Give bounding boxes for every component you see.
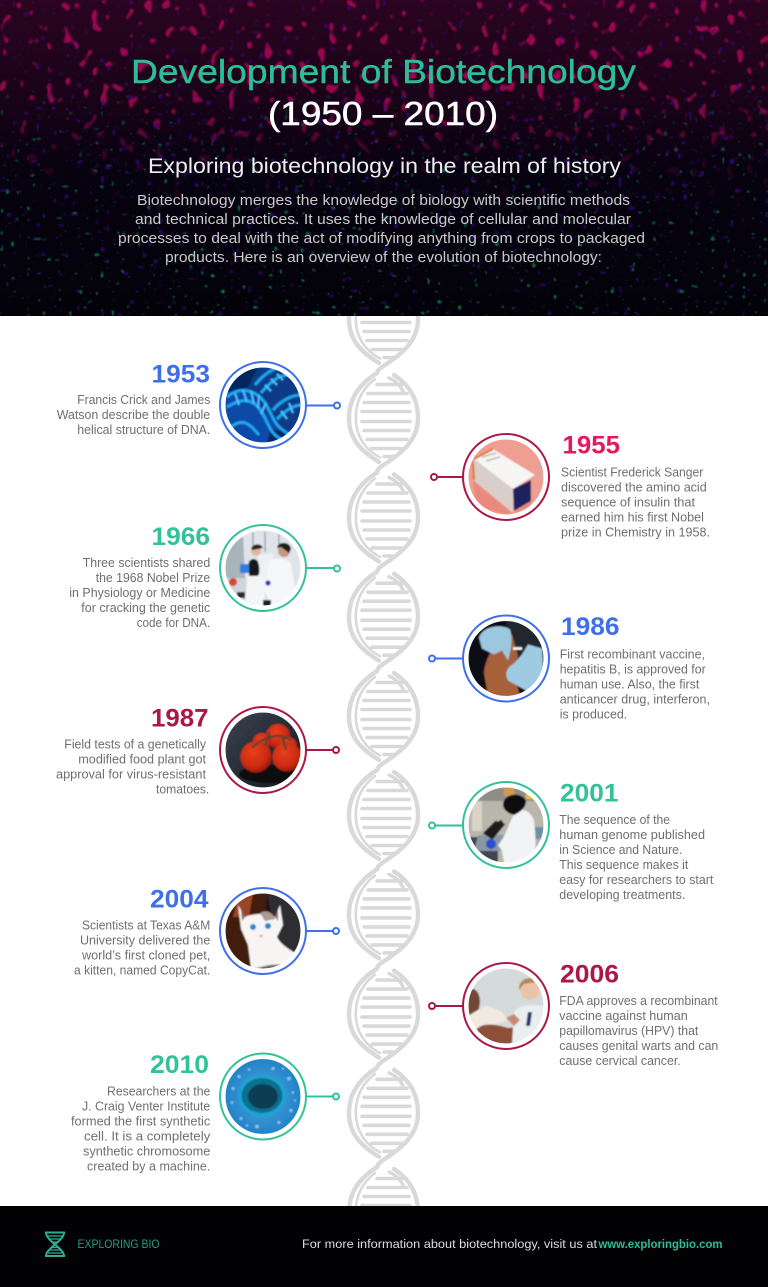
year 2010: 2010	[150, 1051, 209, 1079]
photo: lab scientists	[220, 525, 306, 611]
text 1953: helical structure of DNA.	[77, 422, 210, 437]
connector 1953	[306, 404, 334, 406]
text 2001: This sequence makes it	[559, 857, 689, 872]
text 1986: anticancer drug, interferon,	[560, 691, 710, 706]
text 2004: a kitten, named CopyCat.	[74, 962, 210, 977]
text 2001: easy for researchers to start	[559, 872, 714, 887]
text 1955: earned him his first Nobel	[561, 510, 704, 525]
entry: 2001	[429, 780, 714, 902]
photo: tomatoes	[220, 707, 306, 793]
connector 2001	[435, 824, 463, 826]
footer panel	[0, 1206, 768, 1287]
year 1955: 1955	[562, 432, 620, 460]
connector 2010	[306, 1096, 333, 1098]
entry: 1987	[56, 705, 339, 796]
entry: 1953	[57, 360, 340, 448]
text 1986: human use. Also, the first	[560, 676, 700, 691]
photo: scientist at microscope	[463, 782, 549, 868]
subtitle: Exploring biotechnology in the realm of history	[148, 154, 621, 178]
node 1966	[334, 566, 340, 572]
entry: 2010	[71, 1051, 339, 1174]
text 1955: discovered the amino acid	[561, 480, 707, 495]
text 1955: Scientist Frederick Sanger	[561, 465, 704, 480]
text 2004: Scientists at Texas A&M	[82, 917, 210, 932]
photo: insulin box	[463, 434, 549, 520]
title: Development of Biotechnology	[131, 53, 637, 90]
text 1966: Three scientists shared	[83, 555, 210, 570]
text 1966: the 1968 Nobel Prize	[96, 570, 210, 585]
text 1953	[57, 392, 210, 437]
entry: 2004	[74, 885, 339, 977]
intro paragraph: Biotechnology merges the knowledge of biology with scientific methods	[137, 193, 630, 209]
footer link: www.exploringbio.com	[598, 1237, 722, 1251]
text 2006: causes genital warts and can	[559, 1038, 718, 1053]
year 2006: 2006	[560, 960, 619, 988]
text 1953: Watson describe the double	[57, 407, 210, 422]
connector 2006	[435, 1005, 463, 1007]
text 2001: The sequence of the	[559, 812, 670, 827]
photo: white kitten	[220, 888, 306, 974]
text 1987	[56, 736, 209, 796]
text 1966: in Physiology or Medicine	[69, 585, 210, 600]
node 1953	[334, 402, 340, 408]
intro paragraph: and technical practices. It uses the knowledge of cellular and molecular	[135, 212, 631, 228]
text 2001: human genome published	[559, 827, 705, 842]
text 1966	[69, 555, 211, 630]
photo: DNA strands	[220, 362, 306, 448]
header panel	[0, 0, 768, 316]
text 2010: created by a machine.	[87, 1158, 210, 1174]
intro paragraph	[118, 193, 645, 266]
year 1986: 1986	[561, 613, 620, 641]
year 1966: 1966	[152, 523, 210, 551]
node 2004	[333, 928, 339, 934]
connector 1986	[435, 658, 463, 660]
footer call to action: For more information about biotechnology, visit us at	[302, 1237, 598, 1251]
logo wordmark: EXPLORING BIO	[78, 1237, 160, 1251]
node 1986	[429, 656, 435, 662]
text 2006: cause cervical cancer.	[559, 1053, 681, 1068]
entry: 1966	[69, 523, 340, 630]
text 1953: Francis Crick and James	[77, 392, 210, 407]
node 2010	[333, 1094, 339, 1100]
year 2001: 2001	[560, 780, 619, 808]
node 1955	[431, 474, 437, 480]
text 1986: First recombinant vaccine,	[560, 646, 705, 661]
connector 1987	[306, 749, 333, 751]
text 1955	[561, 465, 710, 540]
text 1986: is produced.	[560, 706, 627, 721]
year 1987: 1987	[151, 705, 208, 733]
text 2006: FDA approves a recombinant	[559, 993, 718, 1008]
photo: vaccine injection	[463, 616, 549, 702]
text 2006: papillomavirus (HPV) that	[559, 1023, 699, 1038]
text 2001: in Science and Nature.	[559, 842, 682, 857]
intro paragraph: processes to deal with the act of modifying anything from crops to packaged	[118, 231, 645, 247]
text 2010: J. Craig Venter Institute	[82, 1098, 210, 1114]
text 2006: vaccine against human	[559, 1008, 688, 1023]
entry: 2006	[429, 960, 718, 1068]
text 2001: developing treatments.	[559, 887, 685, 902]
text 2004	[74, 917, 210, 977]
DNA helix timeline	[349, 274, 418, 1266]
text 1987: tomatoes.	[156, 782, 209, 796]
text 2010	[71, 1084, 211, 1174]
title years: (1950 – 2010)	[268, 95, 498, 132]
text 2004: University delivered the	[80, 932, 210, 947]
node 2001	[429, 822, 435, 828]
text 1966: for cracking the genetic	[81, 600, 211, 615]
text 2010: Researchers at the	[107, 1084, 210, 1098]
text 1966: code for DNA.	[137, 615, 210, 630]
text 1987: Field tests of a genetically	[64, 736, 207, 752]
connector 1966	[306, 567, 334, 569]
photo: doctor and patient	[463, 963, 549, 1049]
text 1986: hepatitis B, is approved for	[560, 661, 706, 676]
logo icon: DNA	[45, 1232, 65, 1256]
entry: 1986	[429, 613, 710, 721]
text 1955: sequence of insulin that	[561, 495, 695, 510]
text 2010: cell. It is a completely	[84, 1128, 211, 1144]
node 1987	[333, 747, 339, 753]
year 2004: 2004	[150, 885, 209, 913]
connector 1955	[437, 476, 463, 478]
text 2010: synthetic chromosome	[83, 1144, 210, 1158]
text 2001	[559, 812, 714, 902]
text 2010: formed the first synthetic	[71, 1114, 211, 1128]
text 1986	[560, 646, 710, 721]
text 1987: approval for virus-resistant	[56, 766, 206, 782]
entry: 1955	[431, 432, 710, 540]
text 1955: prize in Chemistry in 1958.	[561, 525, 710, 540]
text 1987: modified food plant got	[78, 752, 206, 766]
text 2004: world’s first cloned pet,	[81, 947, 210, 962]
text 2006	[559, 993, 718, 1068]
connector 2004	[306, 930, 333, 932]
intro paragraph: products. Here is an overview of the evolution of biotechnology:	[165, 250, 602, 266]
year 1953: 1953	[152, 360, 210, 388]
photo: cell	[220, 1054, 306, 1140]
node 2006	[429, 1003, 435, 1009]
